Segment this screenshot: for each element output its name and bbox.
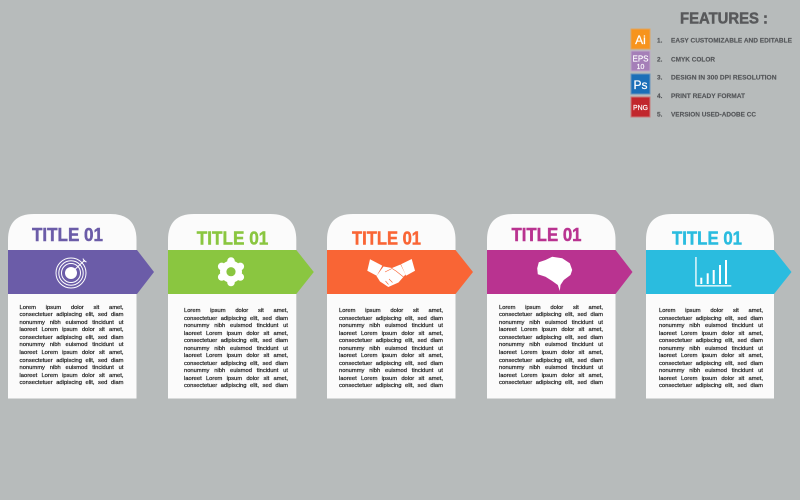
- body text: nonummy nibh euismod tincidunt ut: [184, 323, 288, 329]
- body text: consectetuer adipiscing elit, sed diam: [184, 316, 288, 322]
- body text: [339, 308, 444, 389]
- feature item 2: 2.: [657, 56, 663, 63]
- feature item 5: VERSION USED-ADOBE CC: [671, 112, 756, 118]
- body text: consectetuer adipiscing elit, sed diam: [659, 361, 763, 367]
- feature item 1: 1.: [657, 37, 663, 44]
- body text: [184, 308, 288, 389]
- body text: laoreet Lorem ipsum dolor sit amet,: [499, 327, 603, 333]
- icon: EPS 10 badge: EPS: [632, 54, 649, 64]
- card background: [8, 214, 136, 398]
- feature item 3: DESIGN IN 300 DPI RESOLUTION: [671, 74, 777, 81]
- body text: consectetuer adipiscing elit, sed diam: [339, 338, 443, 344]
- body text: nonummy nibh euismod tincidunt ut: [20, 342, 124, 348]
- features heading: FEATURES :: [680, 10, 768, 27]
- body text: consectetuer adipiscing elit, sed diam: [20, 335, 124, 341]
- body text: consectetuer adipiscing elit, sed diam: [659, 338, 763, 344]
- body text: nonummy nibh euismod tincidunt ut: [184, 368, 288, 374]
- body text: laoreet Lorem ipsum dolor sit amet,: [20, 373, 124, 379]
- body text: nonummy nibh euismod tincidunt ut: [339, 323, 443, 329]
- body text: nonummy nibh euismod tincidunt ut: [339, 368, 443, 374]
- body text: consectetuer adipiscing elit, sed diam: [659, 383, 763, 389]
- body text: laoreet Lorem ipsum dolor sit amet,: [184, 353, 288, 359]
- feature item 3: 3.: [657, 74, 663, 81]
- features panel: [630, 10, 793, 118]
- icon: PNG badge: [631, 97, 650, 117]
- icon: Illustrator badge: [631, 29, 650, 49]
- card background: [168, 214, 296, 398]
- body text: laoreet Lorem ipsum dolor sit amet,: [184, 331, 288, 337]
- body text: consectetuer adipiscing elit, sed diam: [659, 316, 763, 322]
- body text: consectetuer adipiscing elit, sed diam: [184, 383, 288, 389]
- body text: consectetuer adipiscing elit, sed diam: [20, 312, 124, 318]
- arrow band: [646, 250, 792, 294]
- body text: Lorem ipsum dolor sit amet,: [499, 305, 603, 311]
- icon: handshake: [367, 259, 415, 287]
- icon: brain: [537, 257, 572, 291]
- panel: card 2 green gear: [168, 214, 314, 398]
- body text: consectetuer adipiscing elit, sed diam: [184, 361, 288, 367]
- card title: TITLE 01: [196, 228, 268, 248]
- body text: nonummy nibh euismod tincidunt ut: [499, 365, 603, 371]
- card background: [327, 214, 456, 398]
- icon: Photoshop badge: [631, 74, 650, 94]
- card title: TITLE 01: [32, 225, 103, 245]
- body text: [20, 304, 124, 386]
- arrow band: [486, 250, 632, 294]
- body text: nonummy nibh euismod tincidunt ut: [339, 346, 443, 352]
- body text: consectetuer adipiscing elit, sed diam: [499, 358, 603, 364]
- body text: nonummy nibh euismod tincidunt ut: [499, 320, 603, 326]
- card title: TITLE 01: [511, 225, 581, 245]
- body text: nonummy nibh euismod tincidunt ut: [184, 346, 288, 352]
- body text: nonummy nibh euismod tincidunt ut: [20, 320, 124, 326]
- body text: Lorem ipsum dolor sit amet,: [20, 305, 124, 311]
- icon: target with arrow: [56, 258, 86, 288]
- panel: card 3 orange handshake: [327, 214, 473, 398]
- body text: consectetuer adipiscing elit, sed diam: [184, 338, 288, 344]
- panel: card 4 magenta brain: [487, 214, 632, 398]
- body text: laoreet Lorem ipsum dolor sit amet,: [659, 353, 763, 359]
- body text: nonummy nibh euismod tincidunt ut: [659, 323, 763, 329]
- card title: TITLE 01: [352, 228, 421, 248]
- body text: consectetuer adipiscing elit, sed diam: [499, 335, 603, 341]
- panel: card 1 purple target: [8, 214, 154, 398]
- arrow band: [168, 250, 313, 294]
- body text: laoreet Lorem ipsum dolor sit amet,: [184, 376, 288, 382]
- body text: Lorem ipsum dolor sit amet,: [339, 308, 443, 314]
- card background: [646, 214, 774, 398]
- body text: laoreet Lorem ipsum dolor sit amet,: [339, 353, 443, 359]
- body text: Lorem ipsum dolor sit amet,: [659, 308, 763, 314]
- body text: [499, 304, 604, 386]
- icon: EPS 10 badge: [631, 51, 650, 71]
- body text: laoreet Lorem ipsum dolor sit amet,: [339, 331, 443, 337]
- body text: nonummy nibh euismod tincidunt ut: [20, 365, 124, 371]
- icon: gear: [218, 257, 244, 286]
- body text: consectetuer adipiscing elit, sed diam: [499, 312, 603, 318]
- arrow band: [327, 250, 473, 294]
- body text: nonummy nibh euismod tincidunt ut: [659, 346, 763, 352]
- body text: Lorem ipsum dolor sit amet,: [184, 308, 288, 314]
- icon: PNG badge: PNG: [633, 103, 648, 112]
- icon: EPS 10 badge: 10: [637, 64, 644, 71]
- body text: consectetuer adipiscing elit, sed diam: [339, 316, 443, 322]
- feature item 5: 5.: [657, 112, 663, 118]
- feature item 4: PRINT READY FORMAT: [671, 93, 745, 100]
- feature item 4: 4.: [657, 93, 663, 100]
- body text: laoreet Lorem ipsum dolor sit amet,: [499, 350, 603, 356]
- body text: consectetuer adipiscing elit, sed diam: [339, 361, 443, 367]
- body text: consectetuer adipiscing elit, sed diam: [339, 383, 443, 389]
- panel: card 5 cyan chart: [646, 214, 792, 398]
- body text: consectetuer adipiscing elit, sed diam: [499, 380, 603, 386]
- body text: consectetuer adipiscing elit, sed diam: [20, 358, 124, 364]
- body text: laoreet Lorem ipsum dolor sit amet,: [659, 331, 763, 337]
- icon: bar chart: [695, 257, 731, 286]
- body text: laoreet Lorem ipsum dolor sit amet,: [339, 376, 443, 382]
- body text: nonummy nibh euismod tincidunt ut: [659, 368, 763, 374]
- feature item 1: EASY CUSTOMIZABLE AND EDITABLE: [671, 37, 793, 44]
- feature item 2: CMYK COLOR: [671, 56, 715, 63]
- card title: TITLE 01: [672, 228, 742, 248]
- icon: Illustrator badge: Ai: [635, 33, 646, 47]
- body text: consectetuer adipiscing elit, sed diam: [20, 380, 124, 386]
- body text: laoreet Lorem ipsum dolor sit amet,: [499, 373, 603, 379]
- body text: nonummy nibh euismod tincidunt ut: [499, 342, 603, 348]
- body text: [659, 308, 764, 389]
- body text: laoreet Lorem ipsum dolor sit amet,: [20, 327, 124, 333]
- body text: laoreet Lorem ipsum dolor sit amet,: [659, 376, 763, 382]
- body text: laoreet Lorem ipsum dolor sit amet,: [20, 350, 124, 356]
- icon: Photoshop badge: Ps: [633, 78, 648, 92]
- card background: [486, 214, 615, 398]
- arrow band: [8, 250, 154, 294]
